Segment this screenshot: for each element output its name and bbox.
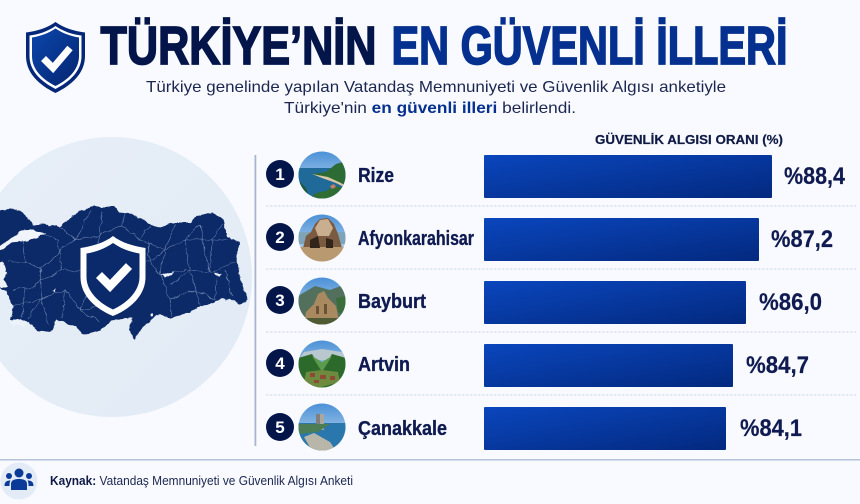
Aegean coast notch [0,261,8,287]
value: %84,1 [740,415,802,442]
map panel: Turkey with shield [0,137,252,417]
row 4: Artvin [266,340,809,388]
bar [484,344,733,387]
row 2: Afyonkarahisar [266,214,833,262]
icon: people [0,462,38,500]
rank badge 3: 3 [275,291,285,310]
subtitle: Türkiye genelinde yapılan Vatandaş Memnuniyeti ve Güvenlik Algısı anketiyle [146,79,726,96]
map of Turkey [0,206,247,340]
photo: Bayburt [298,277,346,325]
rank badge 4: 4 [275,354,285,373]
bar [484,407,726,450]
province borders [8,210,236,325]
name: Rize [358,165,394,187]
map shield with check [80,236,146,316]
lakes [10,272,222,328]
rank badge 1 [266,160,294,188]
background circle [0,137,252,417]
title [100,17,788,76]
name: Afyonkarahisar [358,228,474,250]
bar [484,155,772,198]
photo: Çanakkale [298,403,346,451]
rank badge 1: 1 [275,165,285,184]
photo: Afyonkarahisar [298,214,346,262]
rank badge 4 [266,349,294,377]
value: %87,2 [771,226,833,253]
rank badge 5: 5 [275,418,285,437]
value: %86,0 [759,289,822,316]
name: Çanakkale [358,418,447,440]
header shield icon [26,22,85,93]
value: %84,7 [746,352,809,379]
rank badge 5 [266,413,294,441]
rank badge 2: 2 [275,228,285,247]
subtitle [146,79,726,117]
footer rule [0,459,860,460]
bar [484,218,759,261]
source text: Kaynak: Vatandaş Memnuniyeti ve Güvenlik Algısı Anketi [50,474,353,488]
title: TÜRKİYE’NİN [100,17,376,76]
rank badge 3 [266,286,294,314]
bar [484,281,746,324]
name: Artvin [358,354,410,376]
photo: Artvin [298,340,346,388]
subtitle: Türkiye'nin en güvenli illeri belirlendi. [284,100,576,117]
rank badge 2 [266,223,294,251]
value: %88,4 [784,163,846,190]
row 3: Bayburt [266,277,822,325]
row 1: Rize [266,151,846,200]
chart column header: GÜVENLİK ALGISI ORANI (%) [595,132,783,147]
row 5: Çanakkale [266,403,802,451]
name: Bayburt [358,291,426,313]
vertical divider [254,155,256,446]
Marmara sea [0,230,45,250]
photo: Rize [298,151,346,200]
